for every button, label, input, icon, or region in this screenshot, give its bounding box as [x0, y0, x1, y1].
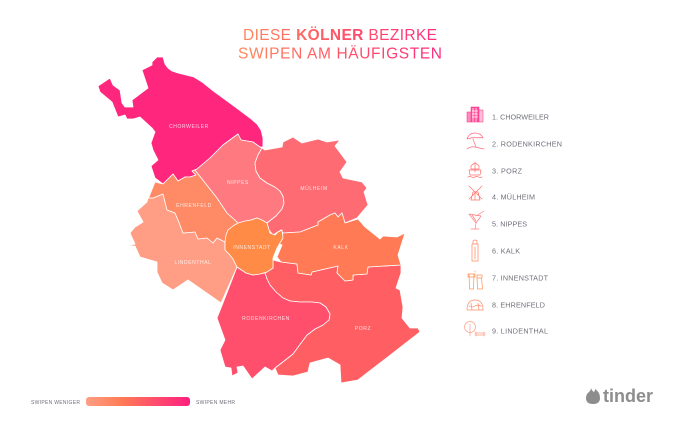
item 3: Porz: 3. PORZ	[492, 166, 523, 176]
item 2: Rodenkirchen: 2. RODENKIRCHEN	[492, 140, 562, 148]
icon: taco	[467, 300, 483, 310]
colour scale legend	[31, 397, 235, 406]
district: Lindenthal: LINDENTHAL	[174, 260, 212, 266]
district: Mülheim	[255, 137, 368, 235]
gradient bar	[86, 397, 190, 406]
wordmark: tinder	[603, 385, 653, 406]
district: Rodenkirchen: RODENKIRCHEN	[242, 316, 290, 322]
item 6: Kalk: 6. KALK	[492, 246, 520, 256]
icon: beer glasses	[468, 271, 482, 289]
item 9: Lindenthal	[464, 322, 548, 336]
legend label: less: SWIPEN WENIGER	[31, 400, 80, 406]
item 6: Kalk	[472, 240, 520, 261]
district: Ehrenfeld	[148, 170, 238, 243]
title	[238, 27, 442, 62]
legend label: more: SWIPEN MEHR	[196, 400, 235, 406]
item 7: Innenstadt: 7. INNENSTADT	[492, 274, 549, 282]
item 2: Rodenkirchen	[467, 133, 562, 149]
icon: ship	[468, 162, 482, 178]
district: Rodenkirchen	[217, 267, 330, 379]
item 1: Chorweiler: 1. CHORWEILER	[492, 112, 549, 122]
item 4: Mülheim	[469, 186, 535, 202]
district: Mülheim: MÜLHEIM	[300, 185, 328, 192]
item 8: Ehrenfeld	[467, 300, 545, 310]
item 7: Innenstadt	[468, 271, 549, 289]
district ranking list	[464, 107, 562, 336]
item 9: Lindenthal: 9. LINDENTHAL	[492, 326, 548, 336]
map of Cologne districts	[98, 57, 420, 383]
tinder logo	[586, 385, 653, 406]
district: Ehrenfeld: EHRENFELD	[176, 203, 212, 209]
icon: high-rise buildings	[467, 107, 483, 122]
district: Nippes	[195, 134, 284, 223]
district: Kalk: KALK	[333, 245, 349, 251]
item 8: Ehrenfeld: 8. EHRENFELD	[492, 300, 545, 310]
district: Nippes: NIPPES	[227, 180, 249, 186]
district: Chorweiler: CHORWEILER	[169, 124, 209, 130]
icon: tree and bench	[464, 322, 485, 336]
title: SWIPEN AM HÄUFIGSTEN	[238, 46, 442, 62]
district: Kalk	[277, 213, 405, 281]
district: Lindenthal	[127, 194, 237, 303]
district: Innenstadt: INNENSTADT	[233, 245, 271, 251]
item 5: Nippes	[469, 211, 527, 229]
item 1: Chorweiler	[467, 107, 549, 122]
item 4: Mülheim: 4. MÜLHEIM	[492, 192, 535, 202]
icon: cocktail glass	[469, 211, 484, 229]
title: DIESE KÖLNER BEZIRKE	[243, 27, 437, 44]
district: Porz	[265, 260, 420, 383]
icon: windmill	[469, 186, 482, 200]
district: Chorweiler	[98, 57, 263, 184]
district: Innenstadt	[225, 218, 283, 275]
icon: beach umbrella	[467, 133, 484, 149]
district: Porz: PORZ	[355, 326, 371, 332]
item 5: Nippes: 5. NIPPES	[492, 220, 527, 228]
item 3: Porz	[468, 162, 523, 178]
icon: tower	[472, 240, 478, 261]
icon: flame	[586, 388, 600, 404]
